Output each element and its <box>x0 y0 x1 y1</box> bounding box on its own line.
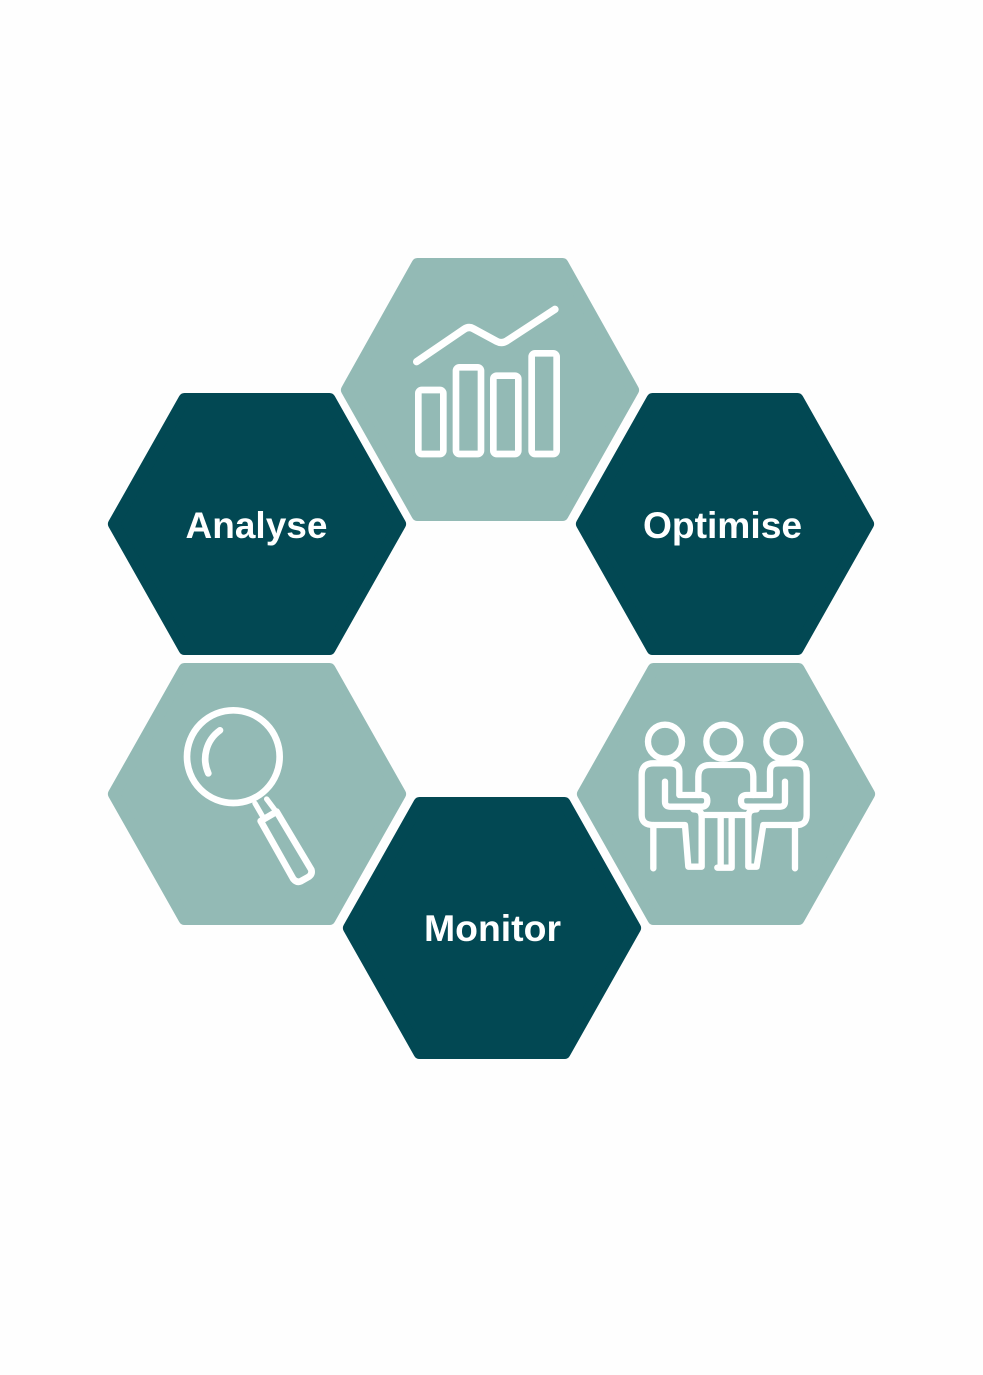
icon: magnifying glass <box>187 710 312 882</box>
hexagon: magnifier icon (lower left) <box>114 669 400 919</box>
hexagon: Analyse <box>114 399 400 649</box>
icon: three people at a table <box>642 725 807 868</box>
hexagon: meeting icon (lower right) <box>583 669 869 919</box>
hexagon: Optimise: Optimise <box>643 504 802 546</box>
hexagon: Monitor: Monitor <box>424 907 561 949</box>
hexagon: Optimise <box>582 399 868 649</box>
hexagon: chart icon (top) <box>347 264 633 515</box>
icon: bar chart with trend line <box>417 309 557 454</box>
hexagon: Monitor <box>349 803 635 1053</box>
hexagon: Analyse: Analyse <box>186 505 327 546</box>
